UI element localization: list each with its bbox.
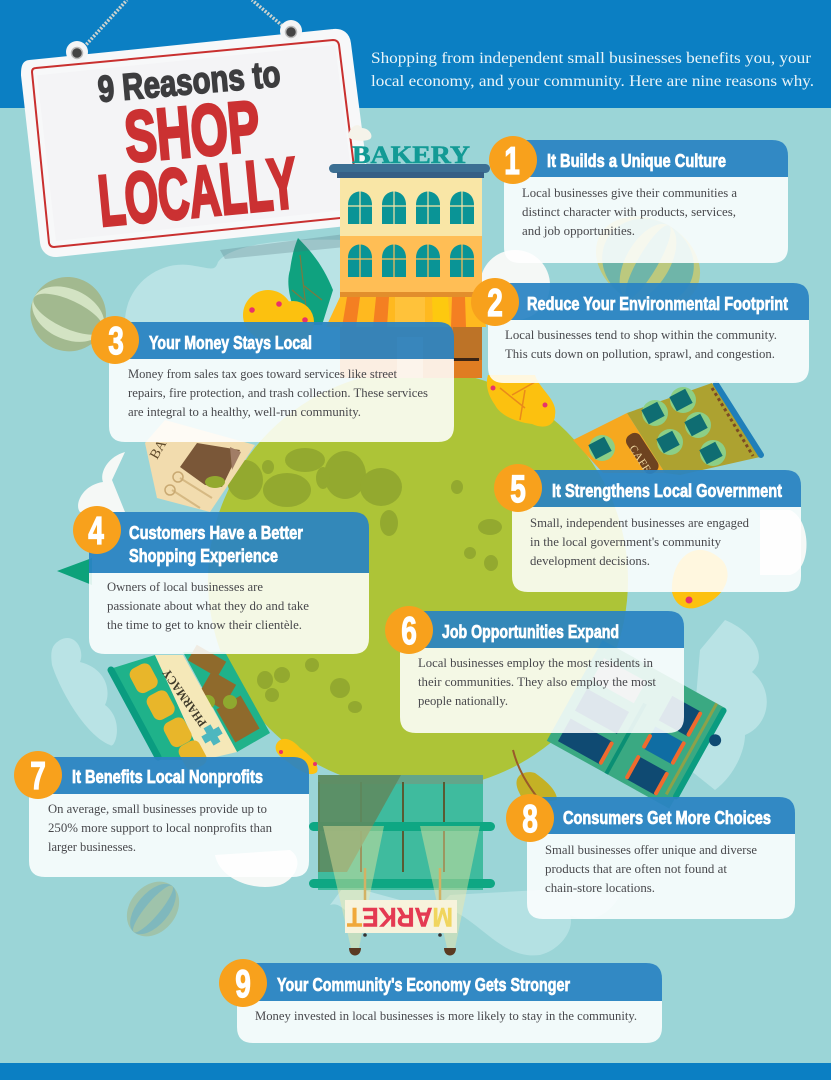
tree: green leaf	[288, 238, 333, 325]
panel: reason 1: distinct character with products, services,	[522, 204, 736, 219]
panel: reason 8: chain-store locations.	[545, 880, 655, 895]
pharmacy cross	[198, 721, 226, 749]
panel: reason 4: Shopping Experience	[129, 545, 278, 566]
panel: reason 4	[73, 506, 369, 654]
tree: small orange	[276, 739, 318, 774]
sign chains	[84, 0, 285, 47]
lamps	[349, 948, 456, 956]
panel: reason 8: Small businesses offer unique and diverse	[545, 842, 757, 857]
panel: reason 7: larger businesses.	[48, 839, 136, 854]
tree: orange top right of planet	[487, 375, 555, 427]
panel: reason 5: Small, independent businesses are engaged	[530, 515, 749, 530]
panel: reason 9: Your Community's Economy Gets Stronger	[277, 974, 570, 995]
panel: reason 5: in the local government's community	[530, 534, 721, 549]
panel: reason 8	[506, 794, 795, 919]
pharmacy roof	[183, 652, 270, 752]
panel: reason 3	[91, 316, 454, 442]
panel: reason 1: and job opportunities.	[522, 223, 635, 238]
tree: orange behind card 5	[672, 550, 728, 608]
panel: reason 9: Money invested in local businesses is more likely to stay in the community.	[255, 1008, 637, 1023]
panel: reason 6: 6	[401, 610, 417, 653]
panel: reason 8: Consumers Get More Choices	[563, 807, 771, 828]
tree: olive with branch	[513, 750, 557, 805]
header intro text: Shopping from independent small businesses benefits you, your	[371, 50, 812, 67]
tree: yellow round	[243, 290, 314, 343]
panel: reason 7: 7	[30, 755, 46, 798]
title: LOCALLY: LOCALLY	[95, 143, 301, 242]
sign shadow	[220, 234, 345, 259]
building: bank: BA	[147, 437, 171, 462]
pharmacy fascia	[155, 655, 237, 760]
panel: reason 9	[219, 959, 662, 1043]
building: bakery	[326, 125, 490, 378]
pharmacy name: PHARMACY	[160, 666, 209, 729]
panel: reason 7: 250% more support to local nonprofits than	[48, 820, 272, 835]
bakery windows	[348, 192, 474, 277]
balloon: top left	[18, 265, 118, 364]
background clouds	[51, 240, 767, 955]
panel: reason 6	[385, 606, 684, 733]
panel: reason 2	[471, 278, 809, 383]
panel: reason 2: This cuts down on pollution, sprawl, and congestion.	[505, 346, 775, 361]
pharmacy windows	[127, 661, 209, 773]
panel: reason 2: Local businesses tend to shop within the community.	[505, 327, 777, 342]
market	[309, 775, 495, 956]
panel: reason 7: It Benefits Local Nonprofits	[72, 766, 263, 787]
balloon: bottom left	[116, 871, 190, 947]
shopfront	[340, 327, 482, 378]
footer band	[0, 1063, 831, 1080]
panel: reason 3: repairs, fire protection, and trash collection. These services	[128, 385, 428, 400]
white clouds	[78, 250, 807, 887]
sign board	[29, 37, 365, 249]
panel: reason 8: products that are often not found at	[545, 861, 727, 876]
building: bank	[145, 420, 255, 512]
panel: reason 6: people nationally.	[418, 693, 508, 708]
panel: reason 5: 5	[510, 468, 526, 511]
cafe sign	[623, 430, 661, 477]
panel: reason 5: development decisions.	[530, 553, 650, 568]
building: cafe: CAFE	[626, 443, 653, 475]
panel: reason 3: 3	[108, 320, 124, 363]
building: lower right	[547, 640, 736, 815]
panel: reason 7	[14, 751, 309, 877]
panel: reason 4: the time to get to know their clientèle.	[107, 617, 302, 632]
grommets	[66, 20, 302, 63]
market text: MARKET	[347, 902, 453, 932]
flag: green triangle	[57, 558, 92, 585]
panel: reason 4: passionate about what they do and take	[107, 598, 309, 613]
panel: reason 4: 4	[88, 510, 104, 553]
pharmacy green front	[113, 655, 203, 760]
market sign posts	[365, 868, 440, 900]
panel: reason 3: Money from sales tax goes toward services like street	[128, 366, 397, 381]
hanging sign	[29, 20, 365, 259]
balloon: top right behind card 1	[579, 198, 717, 326]
panel: reason 2: 2	[487, 282, 503, 325]
panel: reason 3: are integral to a healthy, well-run community.	[128, 404, 361, 419]
header intro text	[371, 50, 814, 90]
title: 9 Reasons to: 9 Reasons to	[96, 53, 282, 110]
roof	[329, 164, 490, 173]
awning	[326, 297, 486, 327]
panel: reason 9: 9	[235, 963, 251, 1006]
panel: reason 1	[489, 136, 788, 263]
chef hat	[348, 125, 371, 141]
market bars	[309, 822, 495, 831]
panel: reason 7: On average, small businesses provide up to	[48, 801, 267, 816]
panel: reason 6: Job Opportunities Expand	[442, 621, 619, 642]
panel: reason 4: Owners of local businesses are	[107, 579, 263, 594]
market window dividers	[319, 782, 444, 872]
panel: reason 1: Local businesses give their communities a	[522, 185, 737, 200]
sign red border	[32, 40, 360, 247]
green planet	[208, 370, 628, 790]
panel: reason 5	[494, 464, 801, 592]
header band	[0, 0, 831, 108]
building: pharmacy	[111, 645, 270, 773]
panel: reason 6: Local businesses employ the most residents in	[418, 655, 653, 670]
panel: reason 6: their communities. They also employ the most	[418, 674, 656, 689]
pharmacy bar	[111, 670, 158, 757]
panel: reason 1: 1	[504, 140, 520, 183]
title: SHOP: SHOP	[121, 86, 263, 178]
panel: reason 3: Your Money Stays Local	[149, 332, 312, 353]
bakery name: BAKERY	[352, 142, 470, 169]
market sign	[345, 900, 457, 933]
header intro text: local economy, and your community. Here are nine reasons why.	[371, 73, 814, 90]
panel: reason 8: 8	[522, 798, 538, 841]
spotlights	[323, 826, 384, 948]
panel: reason 4: Customers Have a Better	[129, 522, 303, 543]
building: cafe	[573, 383, 761, 477]
panel: reason 1: It Builds a Unique Culture	[547, 150, 726, 171]
market dark shade	[318, 775, 401, 872]
walls	[340, 178, 482, 236]
